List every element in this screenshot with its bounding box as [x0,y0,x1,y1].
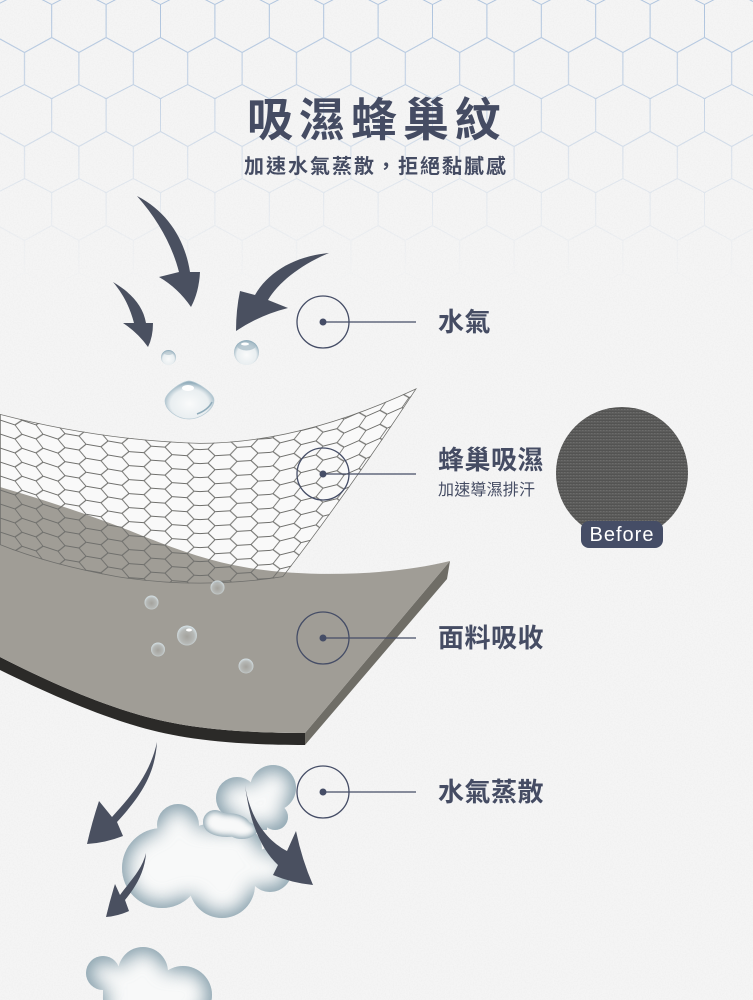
arrow: lower left large [87,742,157,844]
arrow: lower left small [106,853,146,917]
fabric side edge [305,561,450,745]
honeycomb mesh [0,388,417,584]
callout: honeycomb absorption: 加速導濕排汗 [438,480,535,499]
arrows: moisture coming in [113,196,329,347]
honeycomb background pattern [0,0,753,238]
title: 吸濕蜂巢紋 [247,94,507,146]
arrow: large right [236,253,329,331]
water droplets above mesh [161,340,259,419]
droplets on fabric [144,580,254,674]
before badge: Before [590,524,654,546]
fabric top face [0,487,450,733]
callout: honeycomb absorption [297,445,544,500]
callout: fabric absorption: 面料吸收 [438,623,544,653]
subtitle: 加速水氣蒸散，拒絕黏膩感 [244,154,508,178]
droplet small [161,350,176,365]
fabric swatch: before [556,407,688,548]
callout: evaporation: 水氣蒸散 [438,777,544,807]
callout: honeycomb absorption: 蜂巢吸濕 [438,445,544,475]
cloud: centre [122,804,292,918]
cloud: upper right [203,765,296,839]
callout: water vapour [297,296,491,348]
arrow: small left [113,282,153,347]
callout: water vapour: 水氣 [438,307,491,337]
callout: evaporation [297,766,544,818]
droplet medium [234,340,259,365]
arrow: lower right large [245,785,313,885]
fabric underside [0,657,305,745]
before badge [581,521,663,548]
droplet large [165,381,214,419]
callout: fabric absorption [297,612,544,664]
arrows: vapour leaving [87,742,313,917]
fabric layer [0,487,450,745]
arrow: large top [137,196,200,307]
mesh backing [0,388,417,584]
cloud: bottom [86,947,212,1000]
